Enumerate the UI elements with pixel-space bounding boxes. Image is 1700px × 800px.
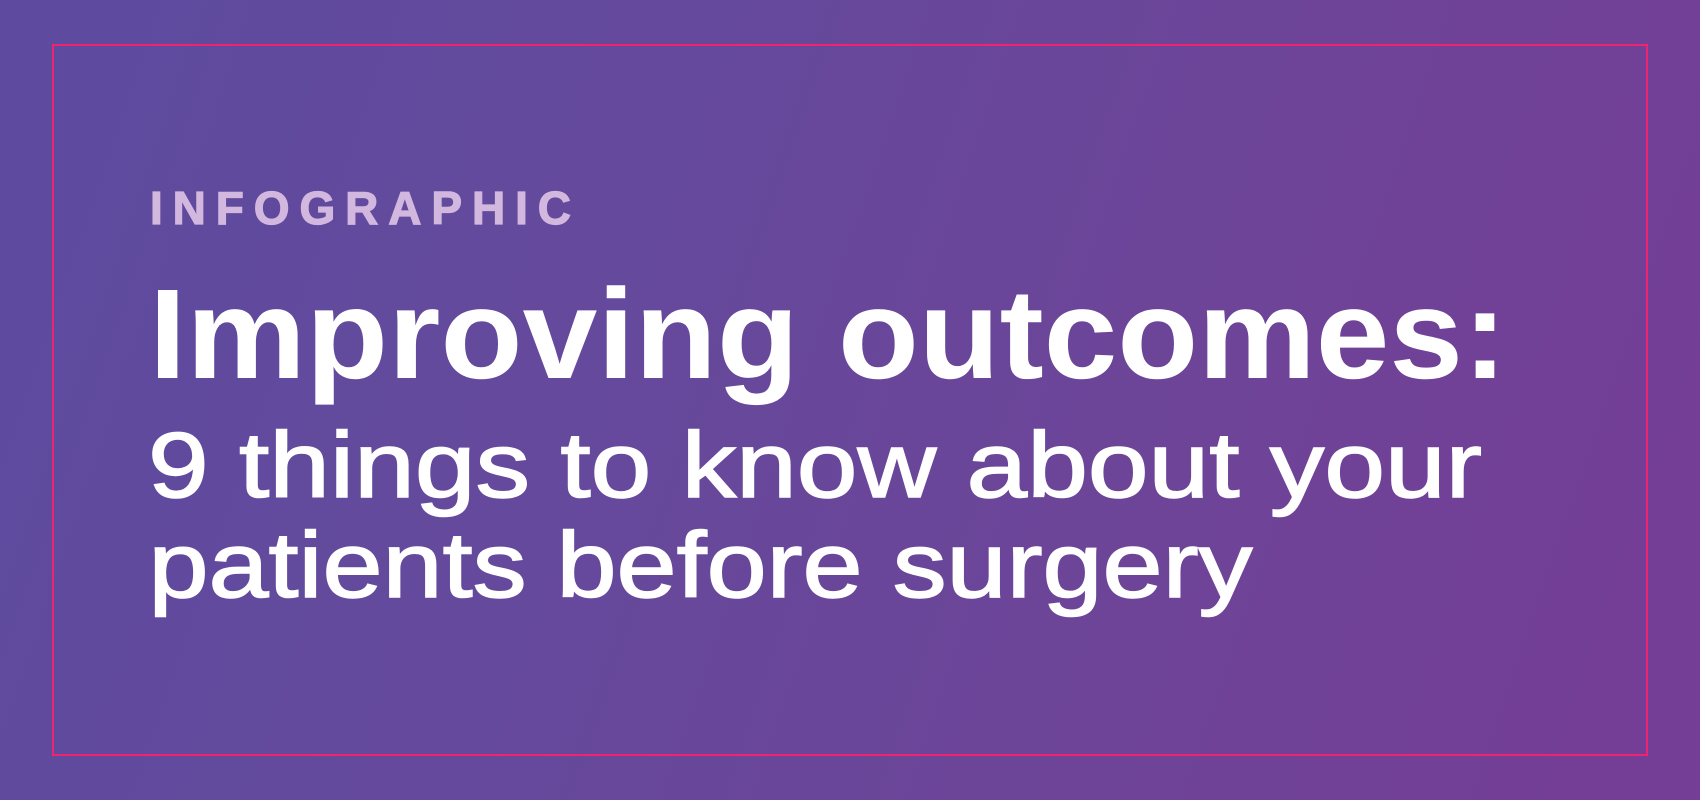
title: [149, 263, 1507, 406]
title: Improving: [149, 263, 799, 406]
subtitle line 2: patients before surgery: [148, 513, 1253, 617]
eyebrow label: INFOGRAPHIC: [150, 182, 571, 234]
subtitle line 1: 9 things to know about your: [148, 413, 1482, 517]
title: outcomes:: [838, 263, 1507, 406]
